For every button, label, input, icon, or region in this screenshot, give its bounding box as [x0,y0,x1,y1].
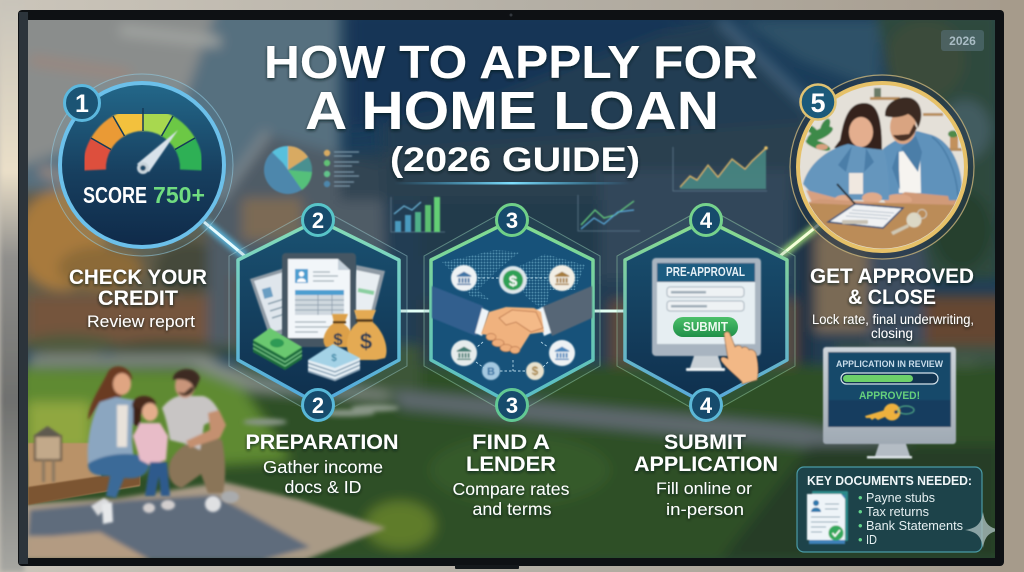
step 4 text [634,431,778,519]
document list: Tax returns [866,504,929,519]
submit button [673,317,738,337]
step 3 text [452,431,570,519]
webcam dot [510,14,512,16]
document list: • [858,532,863,547]
garden lantern [33,426,62,482]
handshake [481,307,544,354]
small dollar coin [526,362,544,380]
step 1 number badge [64,86,100,120]
step 3 bottom number badge [496,390,528,420]
key documents panel [797,467,982,552]
woman [88,366,149,524]
sparkle watermark [965,512,1001,548]
document icon [807,491,848,544]
connector arrow: step 4 to step 5 [780,222,822,256]
document list [858,490,963,547]
step 5 panel: couple photo circle [790,75,980,260]
woman [803,103,889,208]
step 4 top number badge [690,204,722,236]
year badge [941,30,984,51]
family sitting on the deck [88,366,239,524]
title: (2026 GUIDE) [390,141,640,179]
step 3 text: and terms [472,499,552,519]
panel box [797,467,982,552]
signing document [828,204,903,228]
area chart top right [673,146,768,191]
review status text: APPLICATION IN REVIEW [836,359,943,370]
step 3 text: LENDER [466,453,556,476]
document list: • [858,490,863,505]
hexagon frame [617,207,795,416]
dashed network links [476,278,548,371]
step 1 text: Review report [87,312,195,331]
step 3 text: Compare rates [452,479,570,499]
panel heading: KEY DOCUMENTS NEEDED: [807,473,972,488]
hexagon frame [229,207,407,416]
hexagon frame [424,207,600,416]
document list: Payne stubs [866,490,935,505]
submit button: SUBMIT [683,320,728,334]
cash stack [253,328,302,370]
title [264,36,758,179]
gauge segment separators [91,108,195,150]
step 2 bottom number badge: 2 [312,393,324,418]
score text: SCORE [83,182,147,208]
couple signing photo [790,80,980,260]
step 3 bottom number badge: 3 [506,393,518,418]
man [882,97,962,206]
step 4 text: APPLICATION [634,453,778,476]
plant [804,117,835,153]
step 4 text: SUBMIT [664,431,746,454]
house key [891,210,926,235]
pre-approval heading: PRE-APPROVAL [666,265,745,279]
dollar coin center: $ [509,273,518,290]
approved label: APPROVED! [859,390,920,402]
paper stack: $ [331,353,337,364]
bank icon top left [451,265,477,291]
step 2 text [246,431,398,497]
pointing hand [721,332,758,384]
dotted world map [442,250,585,312]
bank icon bottom left [451,340,477,366]
right document [355,264,386,322]
money bags: $ [333,330,343,349]
score text: 750+ [153,182,205,208]
photo rings [790,75,974,259]
left document [249,268,283,336]
form fields [667,287,744,311]
step 1 text: CHECK YOUR [69,266,207,289]
bitcoin coin [482,362,500,380]
review monitor [823,347,956,458]
step 2 text: Gather income [263,457,383,477]
bitcoin coin: B [487,366,495,378]
step 5 text [810,265,974,341]
wood table [800,203,965,260]
step 5 text: & CLOSE [848,286,936,309]
step 4 panel: submit application hexagon [617,204,795,420]
computer monitor [652,258,761,371]
gold key icon [865,404,914,420]
girl [132,396,175,513]
pie chart legend [324,150,359,187]
line chart [578,195,640,231]
step 5 text: GET APPROVED [810,265,974,288]
step 2 top number badge: 2 [312,208,324,233]
connector arrow: step 2 to step 3 [400,310,430,312]
title glow underline [394,182,630,184]
dollar coin center [499,266,527,294]
step 5 number badge [800,84,836,120]
small dollar coin: $ [532,364,539,378]
monitor body [823,347,956,458]
bank icon top right [549,265,575,291]
money bags [324,310,387,360]
document list: • [858,504,863,519]
left suit sleeve [432,286,489,336]
step 2 text: docs & ID [284,477,362,497]
pie chart [264,146,312,194]
paper stack [308,344,360,381]
step 3 text: FIND A [472,431,550,454]
step 4 top number badge: 4 [700,208,713,233]
connector arrow: step 3 to step 4 [594,310,624,312]
step 4 bottom number badge: 4 [700,393,713,418]
document list: Bank Statements [866,518,963,533]
progress bar [841,373,938,384]
bank icon bottom right [549,340,575,366]
step 5 text: Lock rate, final underwriting, [812,312,974,327]
right suit sleeve [536,286,592,336]
step 2 text: PREPARATION [246,431,398,454]
step 5 number badge: 5 [810,88,826,118]
step 1 text: CREDIT [98,287,178,310]
tablet with form document [282,253,356,347]
bar chart [391,197,445,232]
step 4 bottom number badge [690,390,722,420]
title: A HOME LOAN [305,81,719,141]
gauge arc segments [94,119,192,170]
step 3 top number badge: 3 [506,208,518,233]
step 3 panel: find a lender hexagon [424,204,600,420]
document list: ID [866,532,877,547]
step 1 text [69,266,207,331]
step 4 text: in-person [666,500,744,519]
gauge needle [137,130,178,174]
man [162,369,239,512]
step 2 bottom number badge [302,390,334,420]
step 4 text: Fill online or [656,479,752,498]
step 2 top number badge [302,204,334,236]
document list: • [858,518,863,533]
connector arrow: step 1 to step 2 [204,222,246,257]
step 2 panel: preparation hexagon [229,204,407,420]
step 5 text: closing [871,326,913,341]
step 1 number badge: 1 [75,90,89,118]
year badge: 2026 [949,34,976,48]
pen [837,184,855,204]
step 1 panel: credit gauge [51,74,233,256]
gauge outer rings [51,74,233,256]
title: HOW TO APPLY FOR [264,36,758,88]
score text [84,187,204,203]
money bags: $ [360,329,372,354]
step 3 top number badge [496,204,528,236]
